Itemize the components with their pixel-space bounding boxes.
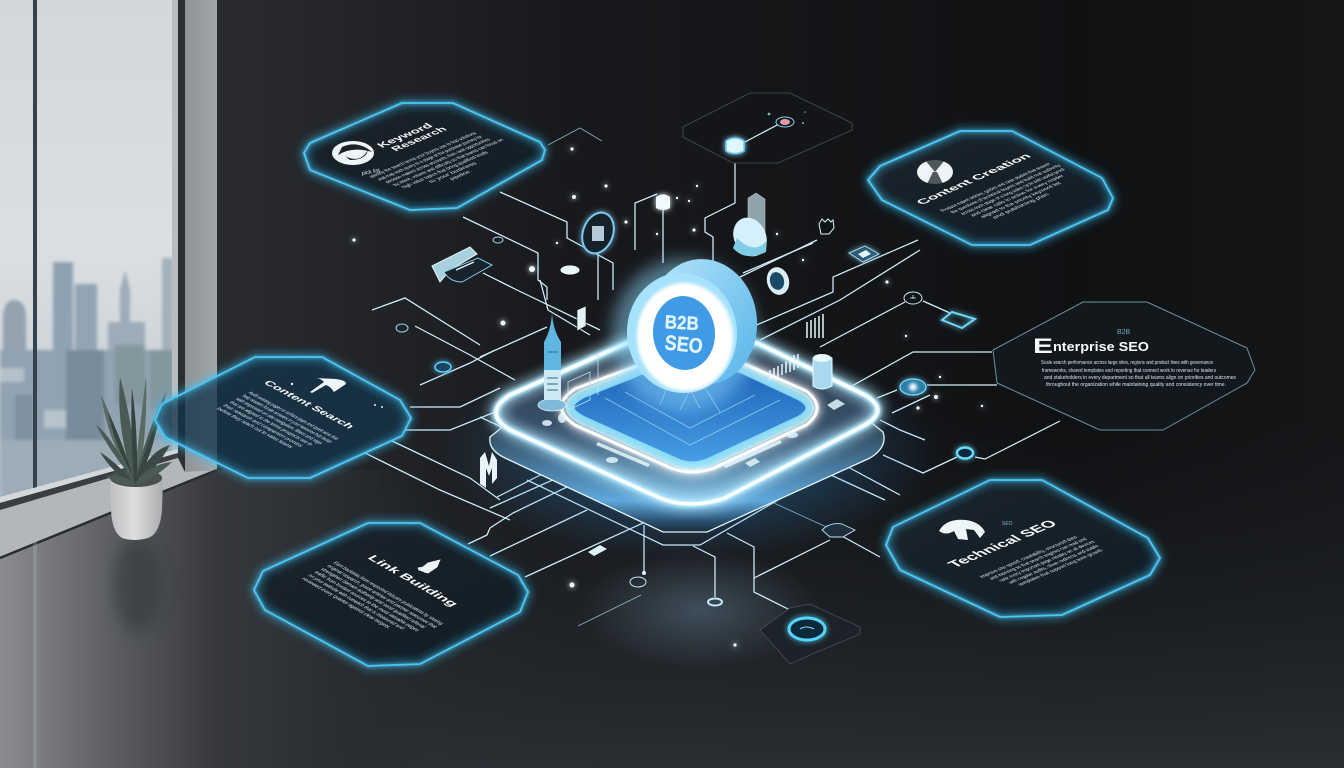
icon: pink target [776, 117, 794, 127]
panel: Keyword Research [304, 103, 545, 210]
body text: Earn backlinks from respected industry publications by sharing [331, 561, 444, 626]
body text: the questions of technical buyers and build real authority [949, 164, 1063, 214]
circuit traces [363, 128, 1060, 626]
icon: arrow mark [310, 378, 346, 393]
icons around the hub [396, 193, 975, 606]
icon: glowing node left [435, 362, 451, 372]
heading: Content Search: Content Search [260, 379, 356, 430]
icon: glowing ring [789, 618, 825, 640]
icon: shield badge [577, 208, 619, 258]
icon: curved arrow [939, 520, 985, 540]
body text: pipeline. [448, 169, 474, 181]
label: B2B SEO: B2B [664, 312, 699, 335]
body text: decision makers across accounts, then rank opportunities [384, 138, 492, 184]
body text [939, 161, 1088, 229]
icon: blob node [822, 524, 855, 537]
body text: and map each query to a stage of the purchase journey for [376, 135, 485, 182]
floor [0, 458, 430, 768]
heading: Keyword Research: Keyword [375, 122, 436, 150]
core circuit detail [605, 385, 780, 445]
small caption: pick list [361, 168, 381, 177]
panel: Content Search [155, 357, 411, 478]
panel: Content Creation [868, 131, 1113, 245]
pot [110, 472, 163, 540]
body text: Identify the search terms your buyers use to find solutions [369, 131, 479, 179]
disc front rim [622, 268, 742, 398]
body text: original research, guest articles and partner resources that [325, 564, 438, 629]
panel: bottom node hexagon [760, 604, 860, 664]
leaves [96, 377, 172, 485]
icon: swirl logo [332, 141, 374, 165]
body text: rank every important page reliably on all devices [998, 540, 1097, 583]
body text: templates that support long term growth [1017, 549, 1105, 587]
body text: frameworks, shared templates and reporting that connect work to revenue for leaders [1042, 368, 1216, 374]
body text: and clear calls to action for every reader [969, 174, 1066, 217]
heading: Keyword Research: Research [389, 126, 450, 153]
body text: that are aligned to the terms prospects use in [227, 401, 314, 447]
small dots [291, 383, 383, 408]
small tag: SEO [1002, 521, 1013, 527]
body text [979, 533, 1109, 593]
icon: small diamond tile [849, 246, 879, 262]
icon: round emblem [917, 158, 953, 184]
city skyline [0, 258, 178, 500]
body text: throughout the organization while maintaining quality and consistency over time. [1046, 382, 1226, 388]
body text: high value topics that bring qualified leads [401, 151, 491, 189]
icon: glowing diamond [942, 312, 975, 328]
panel: Technical SEO [886, 480, 1160, 617]
platform lower base outline [490, 420, 884, 532]
disc white ring [632, 279, 738, 395]
icon: rocket [418, 560, 440, 573]
small tag: B2B [1117, 329, 1131, 336]
letter glyph on floor [480, 452, 497, 488]
body text: with regular audits, clean redirects and stable [1007, 544, 1101, 585]
body text: strengthen domain authority and send qualified referral [319, 568, 427, 629]
body text: reviewed every quarter against clear targets. [300, 577, 392, 630]
window frame [172, 0, 178, 460]
platform bar chart [770, 314, 823, 380]
icon: ellipse badge [560, 265, 580, 275]
body text [369, 128, 523, 200]
platform inner core [570, 368, 810, 466]
icon: ring pin bottom [630, 571, 722, 606]
disc side depth [644, 255, 762, 389]
body text: and indexing so that search engines can read and [988, 537, 1089, 581]
body text: across each stage of a long sales cycle with useful proof [959, 168, 1068, 216]
body text: before they reach out to sales teams [215, 407, 294, 449]
body text: aligned to the priority keyword list [979, 181, 1064, 219]
body text: to your business [428, 161, 479, 184]
icon: ring node [396, 324, 408, 332]
heading: Enterprise SEO: nterprise SEO [1053, 340, 1149, 354]
wall pillar [185, 0, 217, 482]
central B2B SEO disc [612, 255, 762, 411]
body text: help readers locate answers in your resource hub faster [240, 394, 333, 444]
icon: small phone tile [577, 306, 586, 331]
label: B2B SEO [664, 312, 704, 358]
label: B2B SEO: SEO [664, 331, 704, 358]
body text [1041, 360, 1236, 388]
icon: small cube node [656, 194, 670, 210]
window mullion [33, 0, 37, 488]
icon: USB connector [432, 247, 492, 282]
icon: glowing node right [900, 379, 926, 395]
panel: Link Building [254, 523, 528, 666]
icon: glowing ring right [957, 448, 973, 458]
body text: on your website with outreach that is measured and [306, 574, 405, 630]
heading: Link Building: Link Building [364, 554, 460, 608]
disc blue center [650, 293, 718, 373]
window with city skyline [0, 0, 185, 510]
body text: with improved on site navigation, filters and tags [233, 397, 324, 445]
body text: by intent, volume and difficulty so that teams can focus on [392, 138, 506, 187]
platform cylinder [813, 354, 832, 389]
plant reflection [113, 537, 161, 633]
heading: Enterprise SEO [1033, 335, 1149, 358]
heading: Content Creation: Content Creation [914, 152, 1035, 206]
small data dots [352, 147, 983, 647]
central hub platform [440, 313, 940, 560]
body text: Audit existing pages to surface gaps and quick wins that [246, 391, 340, 441]
icon: small ring left [493, 237, 503, 243]
heading: Enterprise SEO: E [1033, 335, 1053, 358]
heading: Technical SEO: Technical SEO [945, 518, 1061, 570]
icon: server tower and disc [727, 193, 773, 262]
body text: traffic from trusted sources to the most valuable pages [312, 571, 420, 632]
body text: and publishing plan [991, 193, 1051, 220]
heading: Keyword Research [375, 120, 450, 155]
icon: ring outline right [904, 292, 922, 304]
panel: top node hexagon [683, 93, 852, 163]
body text: Scale search performance across large sites, regions and product lines with governance [1041, 360, 1213, 366]
icon: chip tile [588, 545, 607, 556]
body text: and stakeholders in every department so that all teams align on priorities and outcomes [1044, 375, 1236, 381]
panel: Enterprise SEO [993, 302, 1255, 430]
icon: hand glyph [819, 219, 834, 234]
platform small glyphs [542, 399, 845, 468]
potted plant [96, 377, 172, 633]
icon: round gauge badge [764, 265, 792, 297]
body text: Produce expert articles, guides and case studies that answer [939, 162, 1053, 213]
icon: glowing node [726, 138, 744, 154]
body text: their research and comparison process [221, 404, 304, 448]
platform tower model [538, 313, 598, 411]
body text: Improve site speed, crawlability, structured data [979, 535, 1080, 579]
platform top slab [496, 343, 878, 504]
